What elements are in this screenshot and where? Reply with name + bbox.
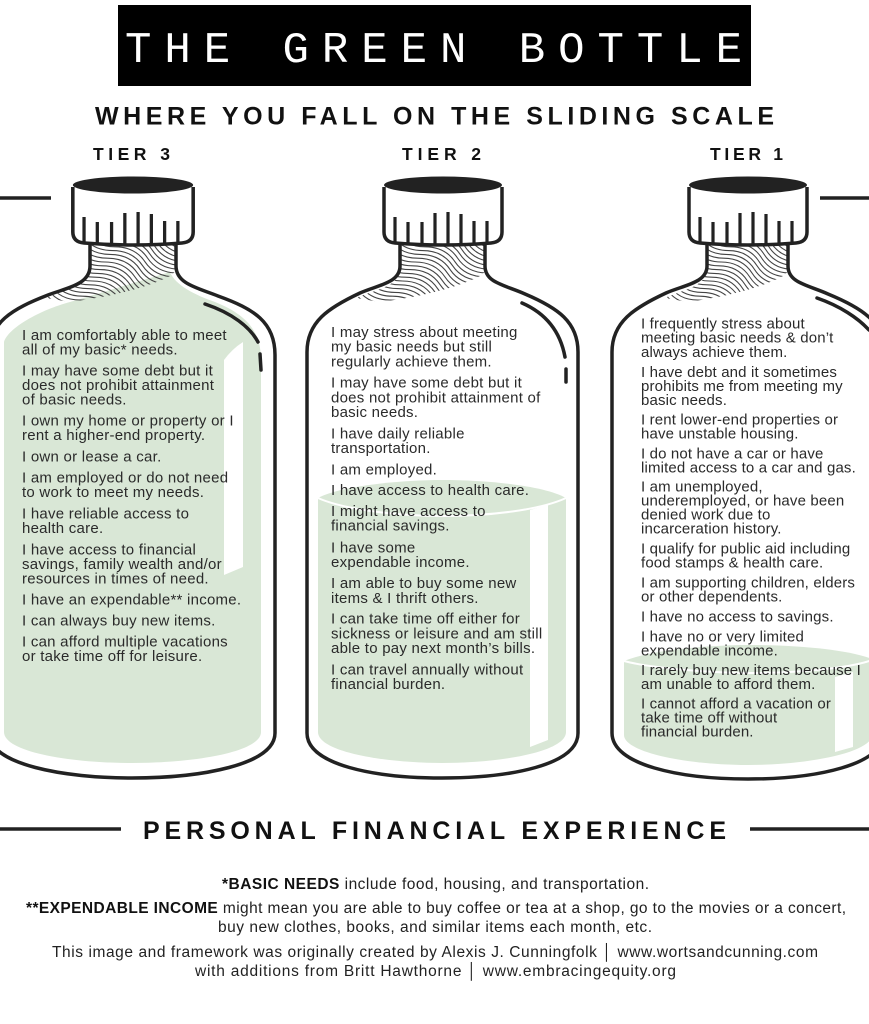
text list: tier 1: take time off without	[641, 710, 778, 726]
neck hatching tier 1	[631, 167, 869, 390]
text list: tier 3: health care.	[22, 520, 103, 537]
text list: tier 2: I can travel annually without	[331, 662, 524, 678]
text list: tier 1: financial burden.	[641, 724, 754, 740]
text list: tier 2: I may have some debt but it	[331, 374, 523, 392]
text list: tier 3: I own my home or property or I	[22, 412, 234, 430]
text list: tier 3	[22, 327, 241, 665]
text list: tier 2: regularly achieve them.	[331, 354, 492, 370]
text list: tier 1: I cannot afford a vacation or	[641, 696, 831, 712]
tier 3 label: TIER 3	[93, 144, 170, 164]
x axis heading: PERSONAL FINANCIAL EXPERIENCE	[143, 817, 726, 845]
scale rule right	[820, 196, 869, 200]
tier 2 label: TIER 2	[402, 144, 481, 164]
neck hatching tier 2	[320, 167, 608, 390]
text list: tier 1: or other dependents.	[641, 588, 782, 606]
glass highlight tier 3	[224, 342, 243, 575]
text list: tier 2: I am employed.	[331, 462, 437, 478]
glass highlight tier 2	[530, 505, 548, 747]
text list: tier 1: have unstable housing.	[641, 426, 799, 442]
text list: tier 3: does not prohibit attainment	[22, 377, 215, 394]
bottle outline tier 3	[0, 245, 275, 778]
text list: tier 3: resources in times of need.	[22, 570, 209, 588]
text list: tier 3: I may have some debt but it	[22, 362, 214, 380]
text list: tier 2: I have daily reliable	[331, 426, 465, 442]
text list: tier 1: I qualify for public aid including	[641, 540, 850, 558]
text list: tier 3: to work to meet my needs.	[22, 484, 204, 501]
text list: tier 2: sickness or leisure and am still	[331, 626, 542, 642]
bottle: tier 3	[0, 167, 298, 778]
tier 1 label: TIER 1	[710, 144, 783, 164]
text list: tier 2: expendable income.	[331, 554, 470, 571]
text list: tier 1: underemployed, or have been	[641, 492, 844, 510]
text list: tier 3: I have reliable access to	[22, 506, 189, 522]
text list: tier 2: financial savings.	[331, 518, 450, 534]
text list: tier 1: I am unemployed,	[641, 478, 763, 496]
text list: tier 1: expendable income.	[641, 642, 778, 660]
expendable income note continued: buy new clothes, books, and similar items each month, etc.	[218, 919, 652, 936]
text list: tier 3: of basic needs.	[22, 392, 127, 408]
text list: tier 1: food stamps & health care.	[641, 554, 823, 572]
bottle cap tier 1	[689, 176, 807, 245]
text list: tier 2: my basic needs but still	[331, 338, 492, 356]
text list: tier 1: basic needs.	[641, 392, 727, 409]
text list: tier 1: I do not have a car or have	[641, 446, 824, 462]
bottle: tier 1	[612, 167, 869, 779]
green liquid tier 3	[4, 272, 261, 763]
text list: tier 3: I have an expendable** income.	[22, 592, 241, 608]
text list: tier 1: denied work due to	[641, 506, 770, 524]
scale rule left	[0, 196, 51, 200]
text list: tier 2: items & I thrift others.	[331, 590, 479, 607]
liquid surface rim tier 1	[624, 660, 869, 673]
text list: tier 1: I have no access to savings.	[641, 608, 834, 626]
text list: tier 2: I can take time off either for	[331, 610, 520, 628]
attribution line one: This image and framework was originally created by Alexis J. Cunningfolk │ www.wortsandcunning.com	[52, 942, 818, 962]
section rule right	[750, 827, 869, 831]
green liquid tier 2	[318, 480, 566, 763]
text list: tier 1: I rent lower-end properties or	[641, 412, 838, 428]
text list: tier 3: I have access to financial	[22, 542, 196, 558]
title banner	[118, 5, 751, 86]
text list: tier 1: meeting basic needs & don’t	[641, 330, 834, 346]
text list: tier 3: I can afford multiple vacations	[22, 634, 228, 650]
text list: tier 1: I frequently stress about	[641, 316, 806, 332]
neck hatching tier 3	[10, 167, 298, 390]
bottle outline tier 2	[307, 245, 578, 778]
text list: tier 3: I can always buy new items.	[22, 612, 216, 630]
glass reflection tier 3	[205, 304, 261, 370]
text list: tier 2: transportation.	[331, 440, 431, 457]
text list: tier 1: I have no or very limited	[641, 628, 804, 646]
title banner: THE GREEN BOTTLE	[125, 26, 742, 76]
text list: tier 3: all of my basic* needs.	[22, 342, 178, 358]
text list: tier 2: I might have access to	[331, 503, 486, 520]
text list: tier 3: I am employed or do not need	[22, 470, 228, 486]
glass highlight tier 1	[835, 672, 853, 752]
text list: tier 3: or take time off for leisure.	[22, 648, 202, 665]
text list: tier 1: always achieve them.	[641, 344, 787, 361]
text list: tier 2: does not prohibit attainment of	[331, 390, 541, 406]
text list: tier 2: I may stress about meeting	[331, 324, 518, 341]
glass reflection tier 1	[817, 298, 869, 330]
attribution line two: with additions from Britt Hawthorne │ www.embracingequity.org	[194, 961, 676, 981]
bottle: tier 2	[307, 167, 608, 778]
text list: tier 2	[331, 324, 542, 693]
text list: tier 2: able to pay next month’s bills.	[331, 640, 535, 657]
text list: tier 1: limited access to a car and gas.	[641, 460, 856, 476]
text list: tier 2: I am able to buy some new	[331, 575, 517, 592]
footnotes	[26, 876, 846, 981]
basic needs note: *BASIC NEEDS include food, housing, and transportation.	[222, 876, 649, 893]
text list: tier 3: I am comfortably able to meet	[22, 327, 227, 344]
text list: tier 1: I have debt and it sometimes	[641, 364, 837, 381]
text list: tier 2: basic needs.	[331, 404, 418, 421]
bottle outline tier 1	[612, 245, 869, 779]
text list: tier 2: I have some	[331, 540, 415, 556]
liquid surface rim tier 2	[318, 498, 566, 516]
text list: tier 3: rent a higher-end property.	[22, 427, 205, 444]
text list: tier 3: savings, family wealth and/or	[22, 556, 222, 573]
text list: tier 1: I rarely buy new items because I	[641, 662, 861, 679]
bottle cap tier 2	[384, 176, 502, 245]
bottle cap tier 3	[73, 176, 193, 245]
expendable income note: **EXPENDABLE INCOME might mean you are able to buy coffee or tea at a shop, go to the movies or a concert,	[26, 900, 846, 917]
text list: tier 2: I have access to health care.	[331, 482, 529, 499]
text list: tier 2: financial burden.	[331, 676, 445, 693]
green liquid tier 1	[624, 645, 869, 765]
section rule left	[0, 827, 121, 831]
glass reflection tier 2	[522, 303, 566, 382]
subtitle: WHERE YOU FALL ON THE SLIDING SCALE	[95, 102, 774, 130]
text list: tier 1: I am supporting children, elders	[641, 574, 855, 592]
text list: tier 3: I own or lease a car.	[22, 448, 162, 466]
text list: tier 1	[641, 316, 861, 740]
text list: tier 1: incarceration history.	[641, 520, 782, 538]
text list: tier 1: prohibits me from meeting my	[641, 378, 843, 395]
text list: tier 1: am unable to afford them.	[641, 676, 815, 693]
